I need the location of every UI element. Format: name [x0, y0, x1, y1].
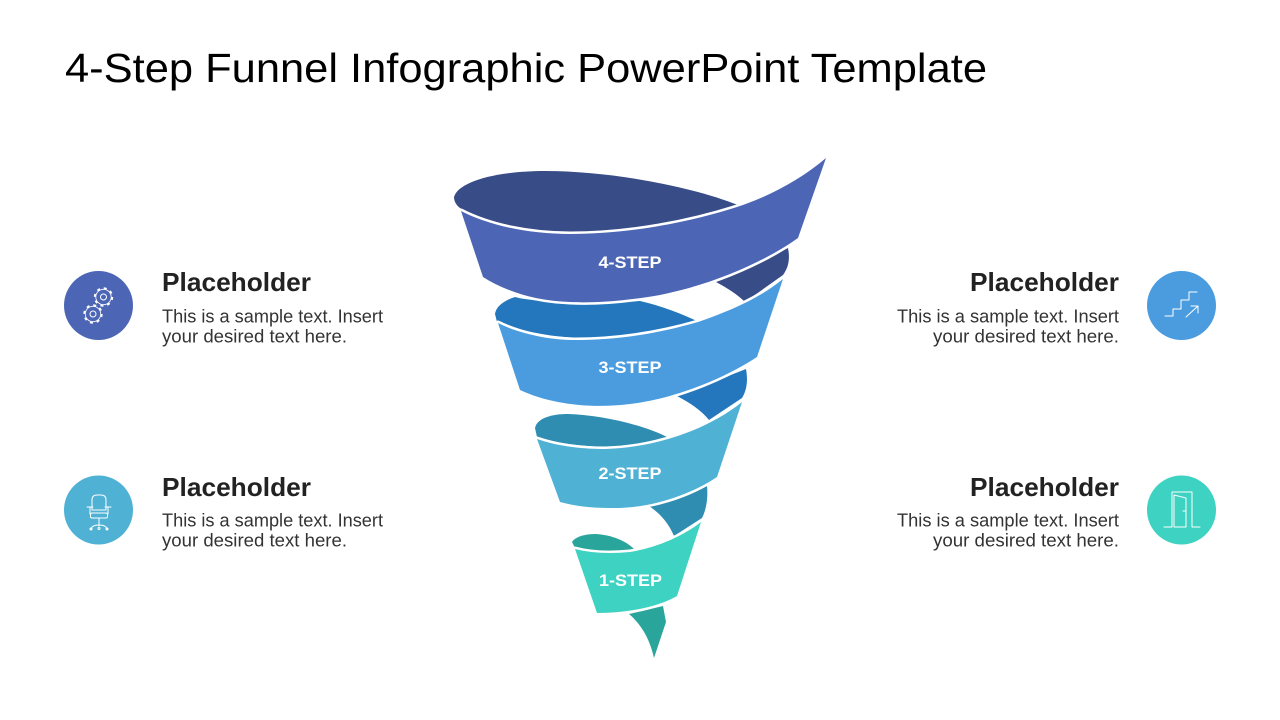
panel: top left placeholder	[64, 267, 383, 346]
tail under step 2	[649, 486, 707, 536]
text block	[162, 306, 383, 346]
step 3 label: 3-STEP	[598, 358, 662, 377]
funnel	[454, 158, 826, 658]
step 3 inner opening	[495, 297, 699, 338]
text block: your desired text here.	[933, 530, 1119, 550]
step 1 inner opening	[572, 534, 634, 553]
step 1 label: 1-STEP	[599, 571, 662, 590]
step 4 band	[461, 158, 826, 302]
step 3 band	[498, 279, 783, 406]
text block	[897, 510, 1119, 550]
text block	[897, 306, 1119, 346]
heading: Placeholder	[162, 472, 311, 502]
text block: This is a sample text. Insert	[162, 510, 383, 530]
step 4 label: 4-STEP	[598, 253, 662, 272]
icon: gears	[64, 271, 133, 340]
text block: your desired text here.	[162, 530, 347, 550]
heading: Placeholder	[162, 267, 311, 297]
step 2 inner opening	[535, 414, 669, 447]
step 2 label: 2-STEP	[598, 464, 662, 483]
icon: office chair	[64, 476, 133, 544]
step 2 band	[537, 402, 742, 508]
title: 4-Step Funnel Infographic PowerPoint Template	[65, 45, 987, 91]
step 4 inner opening	[454, 171, 738, 232]
text block: your desired text here.	[933, 326, 1119, 346]
tail under step 3	[677, 369, 747, 420]
text block: This is a sample text. Insert	[162, 306, 383, 326]
text block: This is a sample text. Insert	[897, 306, 1119, 326]
heading: Placeholder	[970, 472, 1119, 502]
icon: stairs with arrow	[1147, 271, 1216, 340]
tail under step 4	[716, 248, 789, 302]
text block: your desired text here.	[162, 326, 347, 346]
text block: This is a sample text. Insert	[897, 510, 1119, 530]
panel: bottom left placeholder	[64, 472, 383, 550]
heading: Placeholder	[970, 267, 1119, 297]
step 1 band	[575, 522, 701, 613]
icon: open door	[1147, 476, 1216, 544]
tail under step 1	[629, 606, 666, 658]
panel: top right placeholder	[897, 267, 1216, 346]
panel: bottom right placeholder	[897, 472, 1216, 550]
text block	[162, 510, 383, 550]
